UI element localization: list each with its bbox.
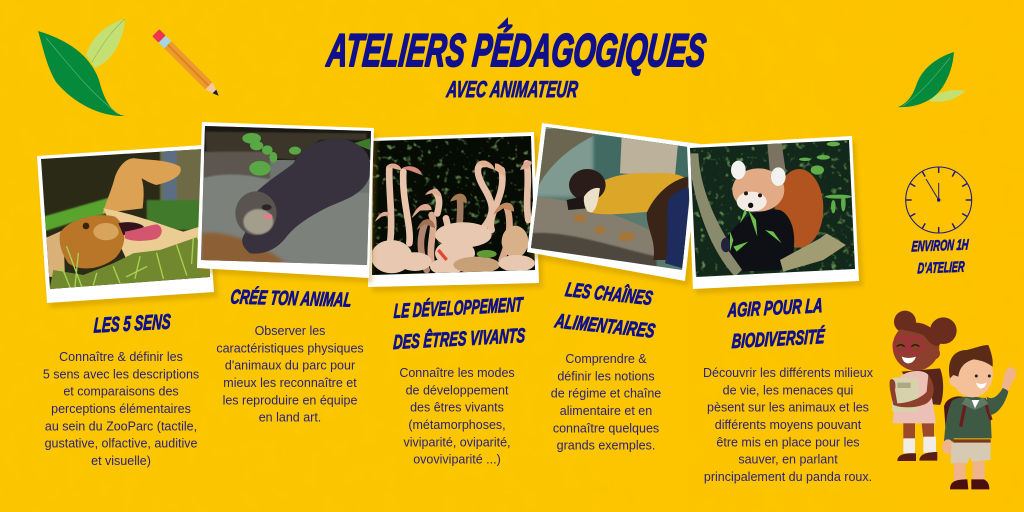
text: le développement [399,366,515,467]
text: les 5 sens: au sein du ZooParc (tactile, [45,419,197,433]
photo: otter [197,122,377,283]
heading: le développement des êtres vivants: LE DÉVELOPPEMENT [393,293,524,323]
text: agir pour la biodiversité [703,366,874,484]
text: le développement: Connaître les modes [399,366,515,380]
heading: le développement des êtres vivants [393,293,526,354]
text: crée ton animal: Observer les [255,324,325,338]
heading: crée ton animal: CRÉE TON ANIMAL [229,286,353,312]
text: les chaînes alimentaires: Comprendre & [565,352,647,366]
text: les 5 sens: 5 sens avec les descriptions [43,367,199,381]
text: agir pour la biodiversité: sauver, en parlant [738,453,838,467]
heading: les chaînes alimentaires: ALIMENTAIRES [552,310,657,343]
girl [890,311,957,461]
text: agir pour la biodiversité: Découvrir les différents milieux [703,366,874,380]
text: les chaînes alimentaires: définir les notions [557,369,655,383]
text: les chaînes alimentaires: connaître quelques [553,421,659,435]
text: les 5 sens [43,350,199,468]
label: durée: D'ATELIER [917,259,965,277]
illustration: children [890,311,1016,489]
heading: les chaînes alimentaires [552,277,657,343]
photo: lion [37,145,218,308]
text: le développement: de développement [406,383,509,397]
icon: leaves top right [898,52,965,107]
text: les 5 sens: et visuelle) [91,454,151,468]
icon: leaves top left [38,19,125,116]
boy [942,345,1016,489]
title [324,17,709,76]
text: les 5 sens: gustative, olfactive, auditive [45,437,197,451]
text: les 5 sens: et comparaisons des [63,385,179,399]
label: durée [911,236,970,277]
text: agir pour la biodiversité: de vie, les menaces qui [723,383,853,397]
text: crée ton animal: mieux les reconnaître et [223,376,357,390]
text: le développement: (métamorphoses, [408,418,506,432]
photo: marten [525,120,705,286]
heading: agir pour la biodiversité [727,295,826,353]
icon: clock [906,167,972,233]
text: agir pour la biodiversité: être mis en place pour les [716,435,860,449]
icon: pencil [152,29,222,99]
text: les chaînes alimentaires: alimentaire et en [560,404,652,418]
text: crée ton animal: d'animaux du parc pour [225,359,355,373]
subtitle: AVEC ANIMATEUR [445,76,579,102]
text: le développement: viviparité, oviparité, [404,435,510,449]
text: agir pour la biodiversité: principalement du panda roux. [704,470,872,484]
text: crée ton animal: en land art. [259,411,321,425]
text: agir pour la biodiversité: pèsent sur les animaux et les [707,401,869,415]
text: les 5 sens: Connaître & définir les [59,350,183,364]
text: le développement: ovoviviparité ...) [413,453,501,467]
text: les chaînes alimentaires: de régime et chaîne [551,387,661,401]
text: crée ton animal [216,324,364,425]
text: crée ton animal: caractéristiques physiques [216,341,364,355]
text: les chaînes alimentaires [551,352,661,453]
title: ATELIERS PÉDAGOGIQUES [324,24,709,76]
text: les chaînes alimentaires: grands exemples. [557,439,655,453]
heading: le développement des êtres vivants: DES ÊTRES VIVANTS [393,323,526,354]
text: agir pour la biodiversité: différents moyens pouvant [715,418,862,432]
text: crée ton animal: les reproduire en équipe [223,393,357,407]
text: le développement: des êtres vivants [410,401,504,415]
heading: les 5 sens: LES 5 SENS [93,310,171,338]
text: les 5 sens: perceptions élémentaires [51,402,191,416]
heading: agir pour la biodiversité: AGIR POUR LA [727,295,823,322]
heading: les chaînes alimentaires: LES CHAÎNES [563,277,655,310]
label: durée: ENVIRON 1H [911,236,970,256]
photo: red panda [687,136,863,294]
photo: flamingos [368,132,543,292]
heading: agir pour la biodiversité: BIODIVERSITÉ [731,325,826,353]
